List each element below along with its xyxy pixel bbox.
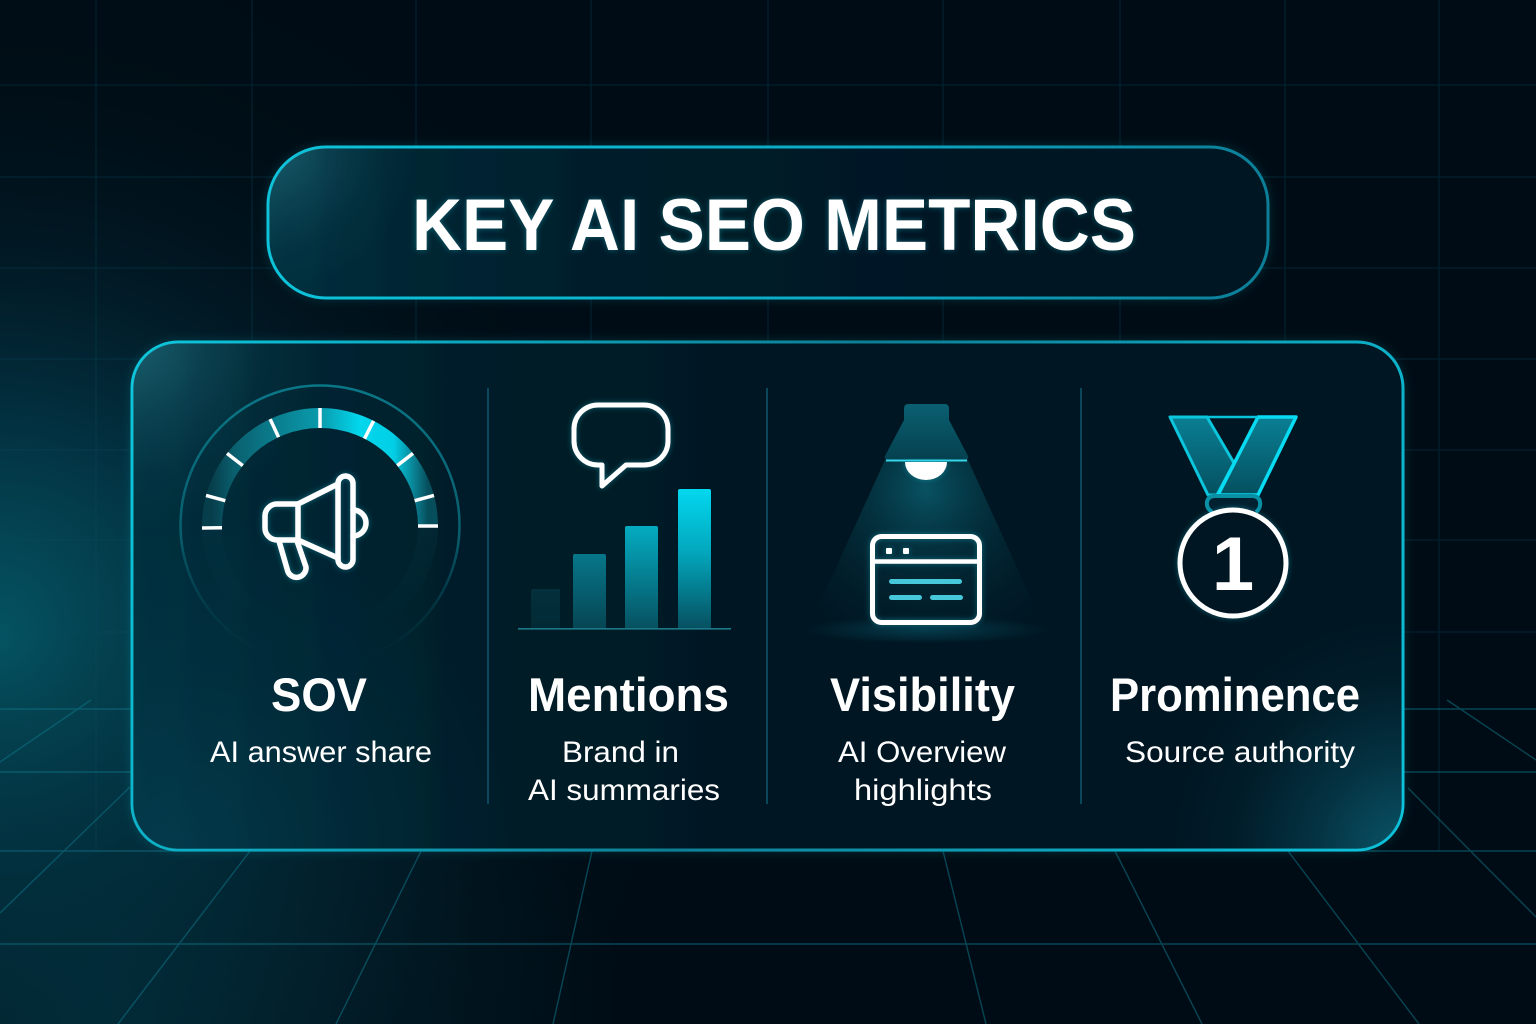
- text: AI Overview highlights: [838, 736, 1006, 807]
- text: Brand in AI summaries: [528, 736, 720, 807]
- metric: Visibility: [801, 404, 1051, 807]
- heading: Visibility: Visibility: [830, 668, 1015, 721]
- bar chart: [518, 489, 731, 630]
- icon: speech bubble: [574, 405, 668, 486]
- heading: SOV: SOV: [271, 668, 368, 721]
- icon: medal: [1170, 417, 1296, 616]
- icon: spotlight lamp: [801, 404, 1051, 644]
- icon: browser window: [872, 536, 980, 622]
- text: AI answer share: AI answer share: [210, 736, 432, 769]
- icon: gauge with megaphone: [180, 386, 460, 664]
- panel: metrics: [132, 342, 1403, 850]
- medal number: 1: [1212, 522, 1254, 607]
- text: Brand in AI summaries: Brand in: [562, 736, 679, 769]
- text: Source authority: Source authority: [1125, 736, 1355, 769]
- metric: Prominence: [1110, 417, 1360, 769]
- metric: SOV: [180, 386, 460, 769]
- title pill: [268, 147, 1268, 298]
- text: AI Overview highlights: AI Overview: [838, 736, 1006, 769]
- text: Brand in AI summaries: AI summaries: [528, 774, 720, 807]
- text: AI Overview highlights: highlights: [854, 774, 992, 807]
- heading: Prominence: Prominence: [1110, 668, 1360, 721]
- metric: Mentions: [518, 405, 731, 807]
- heading: Mentions: Mentions: [528, 668, 729, 721]
- title text: KEY AI SEO METRICS: [412, 185, 1136, 266]
